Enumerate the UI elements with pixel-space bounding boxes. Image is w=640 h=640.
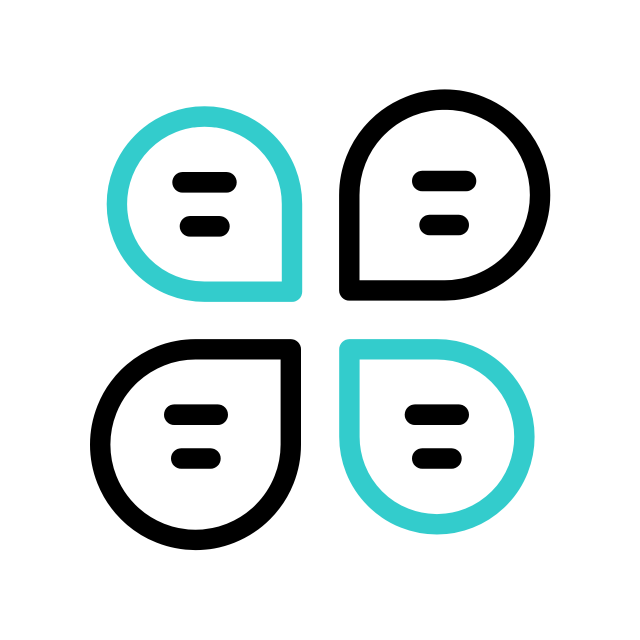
petal: bottom-left black bubble (100, 349, 291, 540)
petal: top-right black bubble (349, 100, 540, 290)
petal: bottom-right teal bubble (349, 349, 524, 524)
petal: top-left teal bubble (117, 116, 292, 292)
